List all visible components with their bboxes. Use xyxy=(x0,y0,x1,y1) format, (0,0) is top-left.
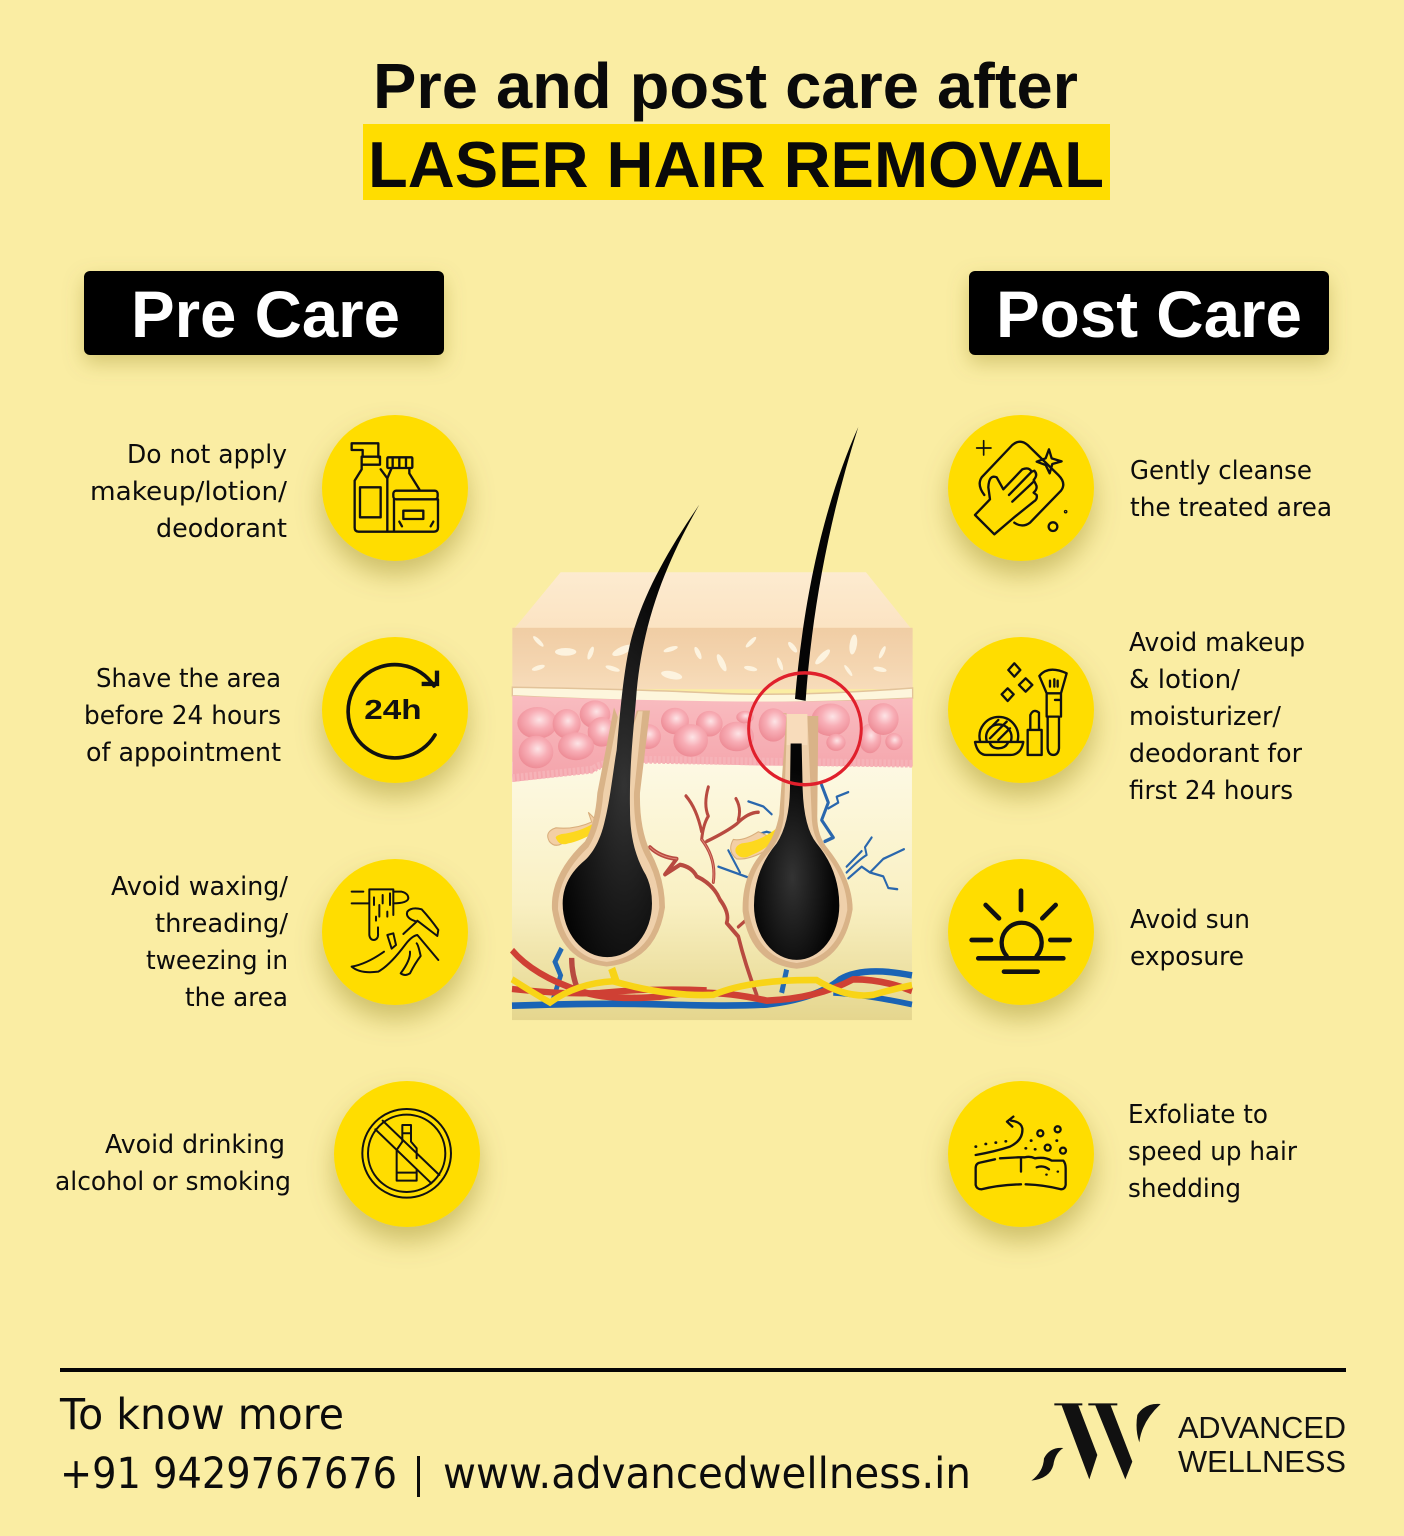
icon: cosmetic bottles xyxy=(322,415,468,561)
icon: no alcohol xyxy=(334,1081,480,1227)
epidermis layer with flakes xyxy=(512,628,913,689)
post care text: sun: exposure xyxy=(1130,942,1244,972)
heading: Pre Care: Pre Care xyxy=(131,277,400,351)
pre care text: alcohol: alcohol or smoking xyxy=(55,1167,291,1197)
pre care text: shave: of appointment xyxy=(86,738,281,768)
pre care text: no makeup: Do not apply xyxy=(127,440,287,470)
bottom vessels xyxy=(512,948,912,1006)
dermis layer xyxy=(512,762,912,1020)
red capillaries xyxy=(650,787,758,995)
pink fat layer with blobs xyxy=(512,696,913,782)
footer contact: www.advancedwellness.in xyxy=(443,1449,971,1499)
icon: exfoliating skin xyxy=(948,1081,1094,1227)
post care text: sun: Avoid sun xyxy=(1130,905,1250,935)
post care text: exfoliate xyxy=(1128,1100,1297,1204)
panel: post care items xyxy=(948,415,1332,1227)
right hair shaft cut above xyxy=(795,427,858,701)
pre care text: shave xyxy=(84,664,281,768)
logo: Advanced Wellness: WELLNESS xyxy=(1178,1444,1346,1479)
post care text: exfoliate: Exfoliate to xyxy=(1128,1100,1268,1130)
post care text: cleanse: the treated area xyxy=(1130,493,1332,523)
icon: cleansing hand xyxy=(948,415,1094,561)
title: LASER HAIR REMOVAL xyxy=(368,128,1104,201)
pre care text: alcohol xyxy=(55,1130,291,1197)
title: Pre and post care after xyxy=(373,50,1078,122)
left hair follicle xyxy=(548,707,665,966)
pre care text: waxing: Avoid waxing/ xyxy=(111,872,288,902)
pre care text: waxing: the area xyxy=(185,983,288,1013)
footer contact xyxy=(59,1390,971,1499)
icon: leg waxing xyxy=(322,859,468,1005)
post care text: avoid makeup: & lotion/ xyxy=(1129,665,1240,695)
pre care text: no makeup: makeup/lotion/ xyxy=(90,477,287,507)
icon: sun xyxy=(948,859,1094,1005)
icon: 24 hours xyxy=(322,637,468,783)
pre care text: shave: before 24 hours xyxy=(84,701,281,731)
icon: makeup xyxy=(948,637,1094,783)
title xyxy=(363,50,1110,201)
logo: Advanced Wellness xyxy=(1031,1403,1346,1481)
pre care text: no makeup: deodorant xyxy=(156,514,287,544)
chart: skin cross-section with hair follicles xyxy=(512,427,913,1020)
logo: Advanced Wellness: ADVANCED xyxy=(1178,1410,1346,1445)
panel: pre care items xyxy=(55,415,480,1227)
post care text: cleanse xyxy=(1130,456,1332,523)
heading: Pre Care xyxy=(84,271,444,355)
right hair follicle xyxy=(731,713,853,969)
basal line xyxy=(512,687,913,703)
post care text: avoid makeup xyxy=(1129,628,1305,806)
red highlight ring xyxy=(749,673,861,785)
right hair xyxy=(754,744,839,960)
post care text: avoid makeup: first 24 hours xyxy=(1129,776,1293,806)
pre care text: no makeup xyxy=(90,440,287,544)
skin top surface xyxy=(513,572,913,631)
post care text: avoid makeup: deodorant for xyxy=(1129,739,1303,769)
post care text: avoid makeup: moisturizer/ xyxy=(1129,702,1281,732)
footer contact: To know more xyxy=(59,1390,344,1440)
pre care text: waxing xyxy=(111,872,288,1013)
pre care text: waxing: threading/ xyxy=(155,909,288,939)
post care text: sun xyxy=(1130,905,1250,972)
divider xyxy=(60,1368,1346,1372)
pre care text: shave: Shave the area xyxy=(96,664,281,694)
post care text: avoid makeup: Avoid makeup xyxy=(1129,628,1305,658)
heading: Post Care: Post Care xyxy=(996,277,1302,351)
post care text: exfoliate: speed up hair xyxy=(1128,1137,1297,1167)
blue capillaries xyxy=(718,785,904,889)
icon: 24 hours: 24h xyxy=(364,694,422,725)
footer contact: +91 9429767676 xyxy=(60,1449,397,1499)
pre care text: waxing: tweezing in xyxy=(146,946,288,976)
pre care text: alcohol: Avoid drinking xyxy=(105,1130,285,1160)
post care text: exfoliate: shedding xyxy=(1128,1174,1241,1204)
left hair xyxy=(563,505,699,957)
post care text: cleanse: Gently cleanse xyxy=(1130,456,1312,486)
